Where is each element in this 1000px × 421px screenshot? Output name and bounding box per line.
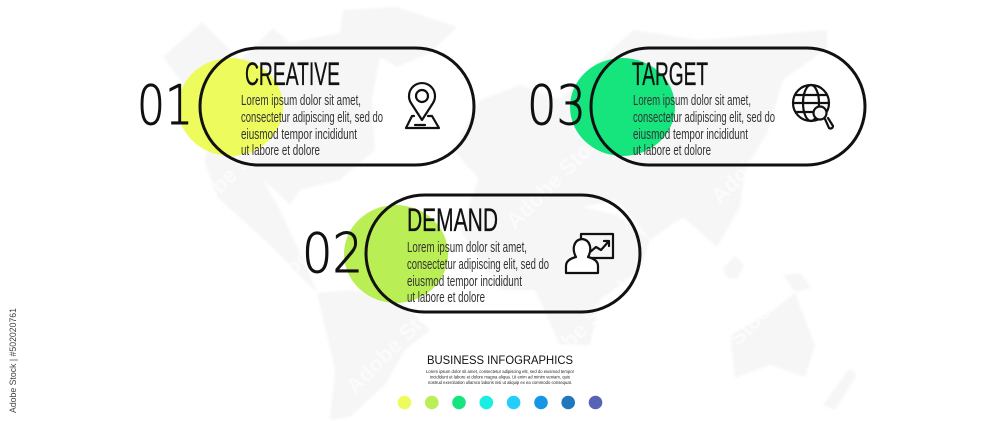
panel: target [527, 48, 865, 165]
heading: CREATIVE [245, 56, 340, 92]
watermark text: Adobe Stock [671, 290, 784, 404]
body text [241, 93, 383, 159]
pill outline [366, 195, 640, 312]
footer heading: BUSINESS INFOGRAPHICS [427, 353, 573, 367]
footer text: incididunt ut labore et dolore magna aliqua. Ut enim ad minim veniam, quis [430, 374, 571, 380]
watermark text: Adobe Stock [341, 285, 454, 399]
footer text [426, 369, 574, 386]
heading: TARGET [632, 56, 708, 92]
watermark text: Adobe Stock [16, 275, 129, 389]
heading: DEMAND [407, 202, 498, 238]
pill outline [200, 48, 474, 165]
body text: eiusmod tempor incididunt [241, 127, 357, 143]
number: 01 [137, 74, 193, 137]
body text: ut labore et dolore [241, 143, 320, 159]
watermark text: Adobe Stock [706, 95, 819, 209]
pill outline [591, 48, 865, 165]
number: 02 [302, 222, 363, 285]
body text: consectetur adipiscing elit, sed do [407, 257, 549, 273]
body text: consectetur adipiscing elit, sed do [633, 110, 775, 126]
watermark text: Adobe Stock [211, 235, 324, 349]
icon: globe with magnifier [793, 85, 833, 129]
footer text: Lorem ipsum dolor sit amet, consectetur adipiscing elit, sed do eiusmod tempor [426, 369, 574, 375]
body text: Lorem ipsum dolor sit amet, [241, 93, 361, 109]
panel: demand [302, 195, 640, 312]
colour dots [398, 396, 602, 409]
body text [407, 240, 549, 306]
accent circle [570, 58, 675, 156]
body text: eiusmod tempor incididunt [633, 127, 748, 143]
side credit: Adobe Stock | #502020761 [8, 308, 19, 413]
body text: Lorem ipsum dolor sit amet, [633, 93, 751, 109]
watermark text: Adobe Stock [41, 70, 154, 184]
body text: ut labore et dolore [407, 290, 485, 306]
watermark text: Adobe Stock [501, 120, 614, 234]
watermark text: Adobe Stock [371, 50, 484, 164]
watermark text: Adobe Stock [526, 270, 639, 384]
accent circle [178, 58, 283, 156]
body text: eiusmod tempor incididunt [407, 274, 522, 290]
icon: presenter with chart [566, 234, 613, 273]
body text: ut labore et dolore [633, 143, 711, 159]
body text: Lorem ipsum dolor sit amet, [407, 240, 527, 256]
world map background [163, 7, 857, 420]
accent circle [344, 205, 448, 303]
watermark text: Adobe Stock [831, 130, 944, 244]
watermark text: Adobe Stock [176, 115, 289, 229]
icon: map pin [406, 83, 439, 128]
body text: consectetur adipiscing elit, sed do [241, 110, 383, 126]
footer text: nostrud exercitation ullamco laboris nisi ut aliquip ex ea commodo consequat. [428, 380, 572, 386]
body text [633, 93, 775, 159]
panel: creative [137, 48, 474, 165]
number: 03 [527, 74, 586, 137]
watermark text: Adobe Stock [876, 260, 989, 374]
